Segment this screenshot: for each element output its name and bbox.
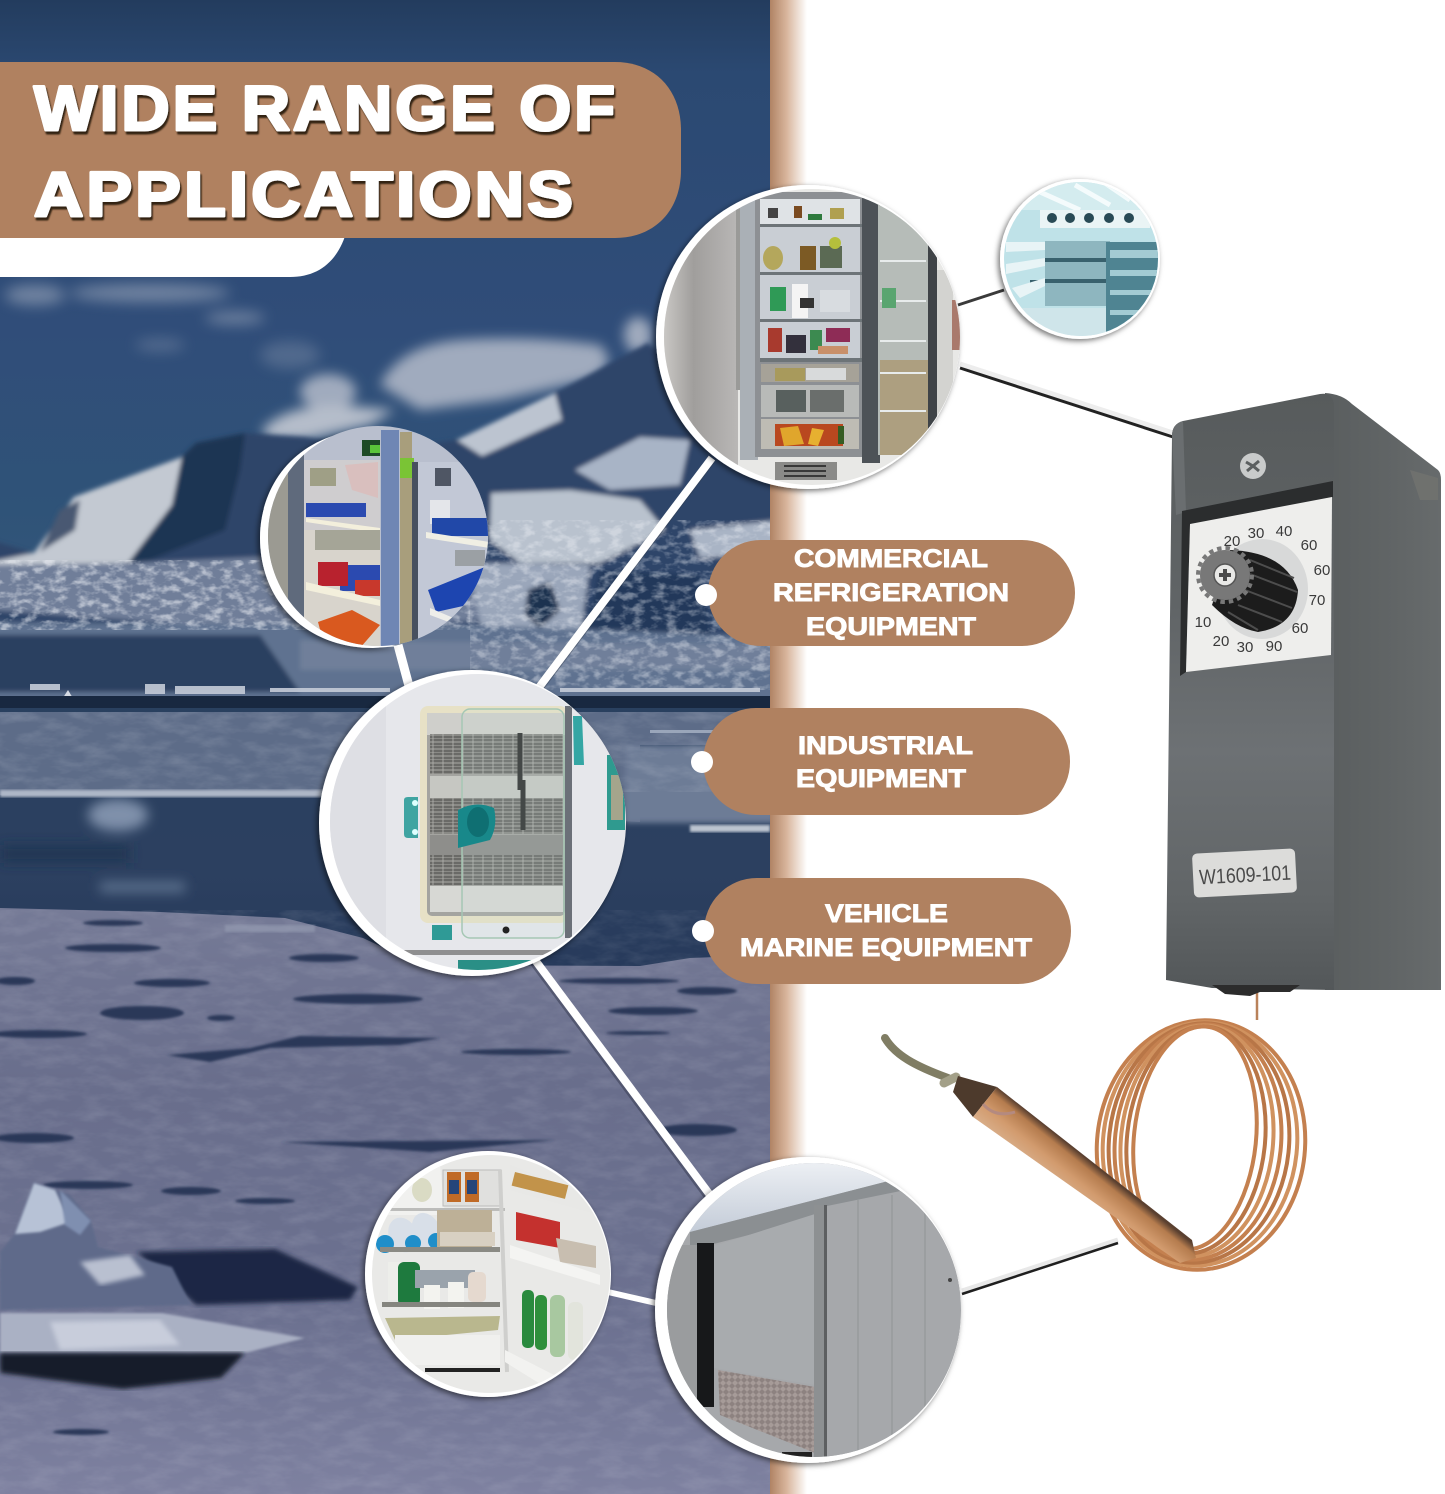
dial numbers: 30 — [1237, 639, 1253, 656]
dial plate — [1186, 497, 1332, 672]
dial opening — [1180, 481, 1333, 676]
top screw — [1240, 453, 1266, 479]
dial numbers — [1195, 523, 1330, 656]
model label: W1609-101 — [1199, 862, 1292, 889]
label pill: commercial refrigeration equipment: REFRIGERATION — [773, 579, 1009, 607]
label pill: industrial equipment: EQUIPMENT — [796, 765, 966, 793]
title text — [34, 74, 618, 230]
dial numbers: 60 — [1292, 620, 1308, 637]
dial numbers: 20 — [1224, 533, 1240, 550]
device side face — [1325, 393, 1441, 990]
photo circle: incubator oven — [319, 670, 636, 976]
sea — [0, 708, 770, 966]
dial ring — [1216, 539, 1308, 639]
label pill: vehicle marine equipment: VEHICLE — [825, 900, 948, 928]
knob barrel — [1212, 550, 1298, 632]
dial numbers: 40 — [1276, 523, 1292, 540]
dial numbers: 60 — [1301, 537, 1317, 554]
dial numbers: 90 — [1266, 638, 1282, 655]
connector lines — [398, 290, 1173, 1303]
ice field — [0, 908, 770, 1494]
photo circle: refrigerated truck — [655, 1157, 970, 1465]
label pill: commercial refrigeration equipment: EQUIPMENT — [806, 613, 976, 641]
label pill: industrial equipment: INDUSTRIAL — [798, 732, 973, 760]
banner pill — [0, 62, 681, 238]
photo circle: commercial refrigerator — [656, 185, 970, 490]
knob gear — [1198, 548, 1252, 602]
dial numbers: 20 — [1213, 633, 1229, 650]
title text: WIDE RANGE OF — [34, 74, 618, 144]
far mountain mass — [0, 343, 780, 700]
title text: APPLICATIONS — [34, 160, 576, 230]
title banner — [0, 62, 681, 277]
label pill: commercial refrigeration equipment: COMMERCIAL — [794, 545, 988, 573]
model label — [1192, 848, 1297, 898]
device front face — [1166, 394, 1334, 990]
copper capillary coil and sensor bulb — [885, 985, 1317, 1280]
brown gradient divider strip — [770, 0, 807, 1494]
label pill: vehicle marine equipment — [692, 878, 1071, 984]
dial numbers: 10 — [1195, 614, 1211, 631]
photo circle: medical supply shelves — [260, 426, 490, 651]
white tab below banner — [0, 230, 347, 277]
bottom bracket — [1212, 985, 1300, 996]
photo circle: cold room — [1000, 179, 1165, 348]
iceberg — [0, 1183, 191, 1310]
label pill: industrial equipment — [691, 708, 1070, 815]
distant ice chunks — [30, 684, 760, 696]
label pill: commercial refrigeration equipment — [695, 540, 1075, 646]
dial numbers: 60 — [1314, 562, 1330, 579]
dial numbers: 70 — [1309, 592, 1325, 609]
dial numbers: 30 — [1248, 525, 1264, 542]
thermostat device — [1166, 393, 1441, 996]
background: arctic scene — [0, 0, 780, 1494]
label pill: vehicle marine equipment: MARINE EQUIPMENT — [740, 934, 1032, 962]
photo circle: open refrigerator — [365, 1150, 615, 1400]
